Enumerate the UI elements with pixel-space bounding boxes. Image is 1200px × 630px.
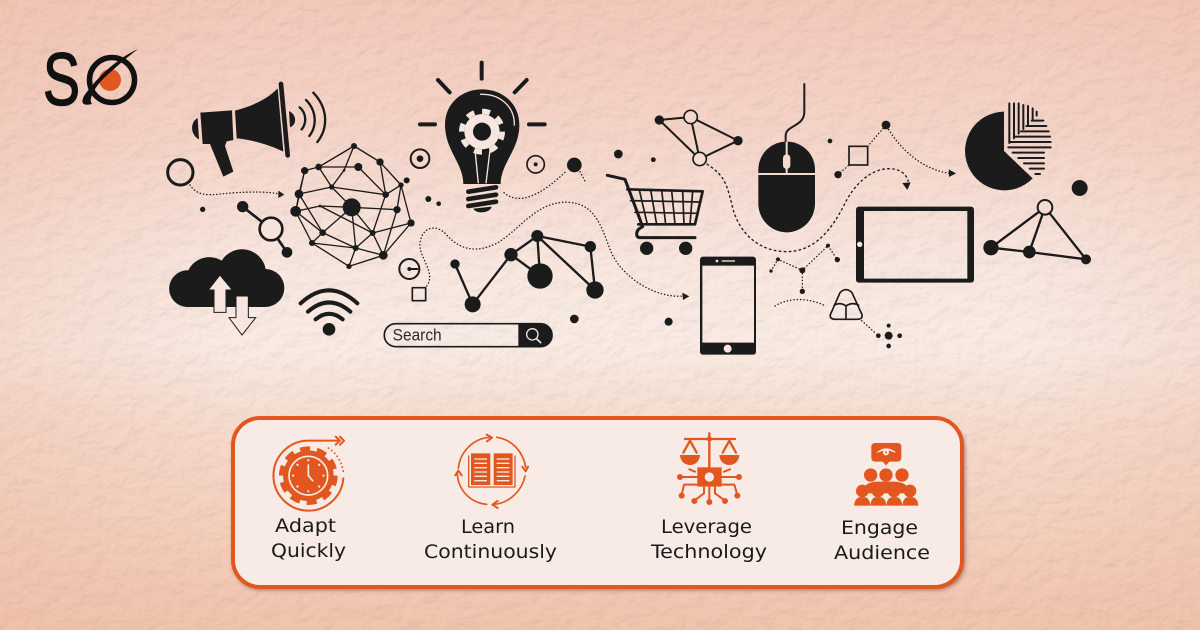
item: Learn Continuously (424, 435, 557, 563)
logo: SO: S (43, 38, 80, 121)
computer mouse (758, 84, 815, 232)
icon: hollow circle with dotted arrow (168, 160, 284, 212)
panel: key actions (233, 418, 965, 590)
label: Engage Audience: Engage (841, 517, 918, 539)
center illustration cluster (384, 63, 703, 347)
icon: lightbulb with gear (420, 63, 545, 212)
dot cluster (876, 324, 902, 348)
label: Adapt Quickly: Quickly (271, 540, 346, 562)
label: Learn Continuously: Learn (461, 516, 515, 538)
icon: wifi (301, 290, 357, 336)
right illustration cluster (651, 84, 1091, 355)
line graph network (450, 230, 604, 312)
dashed curved arrow (707, 164, 911, 252)
label: Engage Audience: Audience (834, 542, 930, 564)
icon: megaphone (192, 84, 325, 177)
logo: SO (43, 38, 138, 121)
label: Leverage Technology: Leverage (661, 516, 752, 538)
dotted tree connector (769, 244, 875, 333)
search bar: Search (393, 326, 442, 345)
icon: book with cycle arrows (455, 435, 528, 508)
label: Leverage Technology: Technology (650, 541, 767, 563)
tablet (856, 207, 974, 283)
dotted square connector (651, 121, 956, 326)
pie chart (965, 103, 1051, 190)
icon: gear clock (273, 437, 344, 511)
icon: scales with circuit chip (677, 433, 742, 505)
label: Learn Continuously: Continuously (424, 541, 557, 563)
small triangle network (655, 110, 743, 166)
icon: audience with eye bubble (854, 443, 918, 506)
item: Leverage Technology (650, 433, 767, 563)
clock, square and long dotted arrow (399, 202, 689, 301)
icon: node link (237, 201, 292, 258)
right triangle network (983, 180, 1091, 264)
item: Engage Audience (834, 443, 930, 564)
icon: cloud upload download (169, 249, 284, 335)
search bar (384, 323, 552, 347)
icon: network sphere (290, 143, 415, 269)
rounded triangle icon (830, 290, 862, 319)
item: Adapt Quickly (271, 437, 346, 562)
label: Adapt Quickly: Adapt (275, 515, 336, 537)
left illustration cluster (168, 84, 415, 336)
smartphone (700, 257, 756, 355)
shopping cart (607, 175, 703, 255)
icons: target circles and dots (411, 149, 672, 326)
dotted connector from bulb (504, 158, 586, 198)
